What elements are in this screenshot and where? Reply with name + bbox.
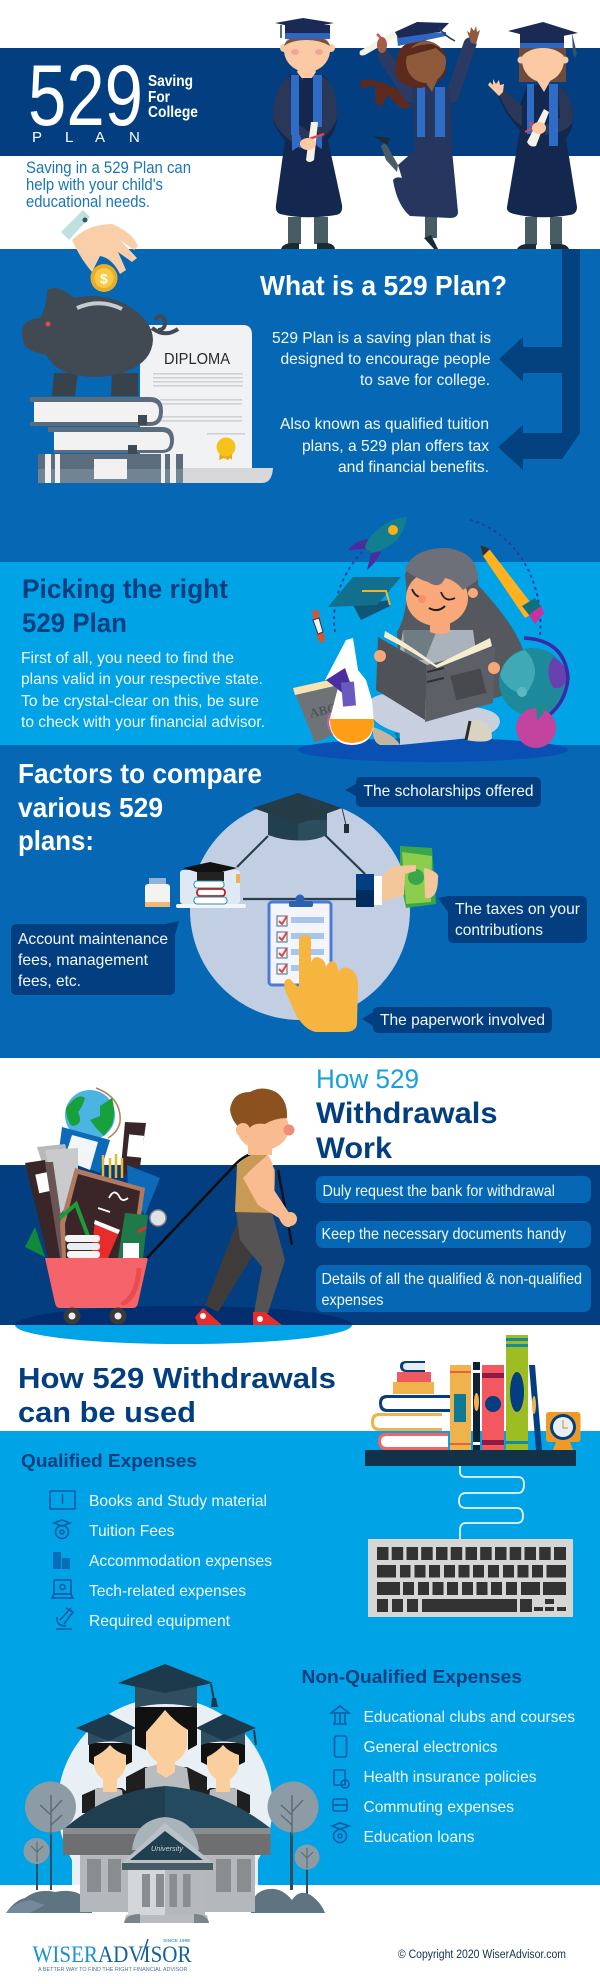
globe <box>499 638 568 748</box>
illustration: boy pulling cart <box>15 1088 352 1344</box>
university building <box>63 1786 270 1923</box>
text: picking body: to check with your financial advisor. <box>21 714 265 731</box>
number 529: 529 <box>28 48 143 144</box>
icon: hand holding money <box>356 846 438 908</box>
list: qualified expenses <box>50 1491 272 1630</box>
saving for college: Saving <box>148 73 193 90</box>
heading: what is a 529 plan: What is a 529 Plan? <box>260 270 507 301</box>
heading: picking the right plan: 529 Plan <box>22 608 127 638</box>
coin: $ <box>100 270 108 286</box>
heading: picking the right plan: Picking the right <box>22 574 228 604</box>
book stack <box>30 397 183 483</box>
callout: taxes: contributions <box>455 922 543 939</box>
crossed legs <box>366 694 500 745</box>
apple base <box>516 708 556 748</box>
icon: laptop with books <box>176 862 246 908</box>
text: picking body: To be crystal-clear on this, be sure <box>21 693 259 710</box>
diploma: DIPLOMA <box>164 351 230 368</box>
icon: loan <box>332 1823 349 1842</box>
item: loans: Education loans <box>364 1829 474 1846</box>
grad cap <box>328 577 401 620</box>
step: details <box>316 1265 591 1312</box>
heading: factors to compare: plans: <box>18 825 94 856</box>
heading: qualified expenses: Qualified Expenses <box>21 1450 197 1471</box>
dotted orbit <box>334 520 540 636</box>
text: also known as: Also known as qualified tuition <box>280 416 489 433</box>
saving for college <box>148 73 198 121</box>
icon: clipboard shield <box>334 1770 349 1788</box>
logo tick <box>141 1939 148 1960</box>
trees <box>24 1782 320 1907</box>
plan spaced letters: PLAN <box>32 129 140 146</box>
item: clubs: Educational clubs and courses <box>364 1709 575 1726</box>
step: keep documents <box>316 1221 591 1248</box>
boy <box>147 1088 297 1325</box>
icon: clipboard checklist <box>269 894 331 985</box>
heading: how withdrawals can be used: How 529 Withdrawals <box>18 1363 336 1395</box>
icon: microscope <box>56 1608 73 1629</box>
callout: paperwork: The paperwork involved <box>380 1012 545 1029</box>
callout: scholarships <box>345 777 541 807</box>
callout: scholarships: The scholarships offered <box>364 783 534 800</box>
bushes <box>6 1889 325 1913</box>
callout: taxes <box>438 896 587 943</box>
stacked books <box>371 1361 450 1450</box>
logo: wiseradvisor: WISERADVISOR <box>32 1942 192 1967</box>
icon: graduation cap <box>253 793 349 840</box>
text: definition: 529 Plan is a saving plan that is <box>272 330 491 347</box>
heading: factors to compare: various 529 <box>18 792 163 823</box>
step: keep documents: Keep the necessary documents handy <box>322 1226 566 1243</box>
face and shirt <box>395 548 480 680</box>
panel: what is a 529 plan background <box>0 249 600 562</box>
desk clock <box>546 1412 580 1450</box>
icon: pointing hand <box>284 935 358 1032</box>
heading: how 529 withdrawals work: How 529 <box>316 1064 419 1094</box>
icon: bottle <box>145 878 170 907</box>
item: electronics: General electronics <box>364 1739 498 1756</box>
step: details: expenses <box>322 1292 384 1309</box>
icon: phone <box>334 1736 346 1757</box>
item: commuting: Commuting expenses <box>364 1799 514 1816</box>
heading: how 529 withdrawals work: Work <box>316 1132 392 1165</box>
item: health: Health insurance policies <box>364 1769 536 1786</box>
heading: picking the right plan <box>22 574 228 638</box>
diagram: factors circle <box>145 793 438 1032</box>
text: picking body: plans valid in your respective state. <box>21 671 263 688</box>
text: also known as: and financial benefits. <box>338 459 489 476</box>
illustration: graduate right <box>488 22 578 249</box>
panel: withdrawals band <box>0 1165 600 1325</box>
callout: taxes: The taxes on your <box>455 901 581 918</box>
hand with wrist <box>61 210 138 274</box>
text: picking body <box>21 650 265 731</box>
heading: how 529 withdrawals work: Withdrawals <box>316 1097 498 1130</box>
arrows: navy connector <box>498 249 580 470</box>
text: definition <box>272 330 491 389</box>
step: request bank <box>316 1176 591 1203</box>
logo since line: SINCE 1998 <box>163 1938 191 1943</box>
intro text: Saving in a 529 Plan can <box>26 159 191 177</box>
keyboard cable <box>459 1466 524 1540</box>
item: books: Books and Study material <box>89 1493 267 1510</box>
text: definition: designed to encourage people <box>280 351 491 368</box>
item: tuition: Tuition Fees <box>89 1523 174 1540</box>
pencil <box>480 545 544 624</box>
illustration: university and graduates <box>6 1664 325 1923</box>
heading: how 529 withdrawals work <box>316 1064 498 1165</box>
illustration: girl reading <box>293 517 568 762</box>
standing books <box>450 1335 542 1450</box>
text: definition: to save for college. <box>360 372 490 389</box>
item: tech: Tech-related expenses <box>89 1583 246 1600</box>
saving for college: For <box>148 89 170 106</box>
icon: book <box>50 1491 75 1509</box>
panel: picking the right plan background <box>0 562 600 745</box>
university building: University <box>151 1846 184 1853</box>
illustration: graduate left <box>273 18 342 249</box>
hair <box>397 548 524 698</box>
panel: factors background <box>0 745 600 1058</box>
list: non-qualified expenses <box>331 1706 575 1846</box>
logo tagline: A BETTER WAY TO FIND THE RIGHT FINANCIAL ADVISOR <box>38 1967 188 1973</box>
rocket <box>348 517 407 570</box>
illustration: graduate jumping <box>360 22 480 249</box>
ground ellipse <box>15 1306 352 1344</box>
callout: paperwork <box>362 1007 552 1033</box>
heading: factors to compare <box>18 758 262 856</box>
graduate right figure <box>194 1714 256 1813</box>
graduate center figure <box>118 1664 218 1800</box>
heading: non-qualified expenses: Non-Qualified Expenses <box>302 1666 522 1687</box>
step: request bank: Duly request the bank for withdrawal <box>322 1183 555 1200</box>
callout: account fees: fees, etc. <box>18 973 81 990</box>
text: picking body: First of all, you need to find the <box>21 650 234 667</box>
header band <box>0 48 600 156</box>
callout: account fees <box>11 921 179 995</box>
title: 529 plan <box>28 48 198 146</box>
text: also known as <box>280 416 489 476</box>
callout: account fees: fees, management <box>18 952 149 969</box>
globe <box>65 1088 120 1140</box>
illustration: bookshelf <box>365 1335 580 1466</box>
keyboard <box>368 1539 573 1617</box>
books in cart <box>25 1122 166 1258</box>
white circle backdrop <box>58 1698 272 1885</box>
flask <box>325 638 374 745</box>
intro text: educational needs. <box>26 193 150 211</box>
crayon <box>312 610 325 643</box>
piggy bank <box>22 288 178 396</box>
intro text: help with your child's <box>26 176 163 194</box>
item: equipment: Required equipment <box>89 1613 231 1630</box>
icon: building <box>53 1552 70 1569</box>
saving for college: College <box>148 104 198 121</box>
shelf <box>365 1450 576 1466</box>
open book <box>374 631 500 722</box>
item: accommodation: Accommodation expenses <box>89 1553 272 1570</box>
abc book: ABC <box>308 700 338 721</box>
icon: tuition <box>54 1520 70 1538</box>
abc book <box>293 678 348 743</box>
heading: factors to compare: Factors to compare <box>18 758 262 789</box>
heading: how withdrawals can be used <box>18 1363 336 1429</box>
panel: expenses background <box>0 1431 600 1885</box>
illustration: piggy bank and diploma <box>22 210 273 483</box>
callout: account fees: Account maintenance <box>18 931 168 948</box>
heading: how withdrawals can be used: can be used <box>18 1397 196 1429</box>
icon: bus <box>333 1799 347 1811</box>
text: also known as: plans, a 529 plan offers tax <box>302 438 489 455</box>
copyright: © Copyright 2020 WiserAdvisor.com <box>398 1949 566 1961</box>
cart <box>45 1258 148 1324</box>
intro text <box>26 159 191 211</box>
diploma <box>140 325 273 483</box>
coin <box>90 264 118 292</box>
graduate left figure <box>76 1714 138 1813</box>
logo: wiseradvisor <box>32 1938 192 1973</box>
icon: laptop <box>52 1580 73 1598</box>
icon: bank <box>331 1706 349 1724</box>
floor shadow <box>298 738 568 762</box>
